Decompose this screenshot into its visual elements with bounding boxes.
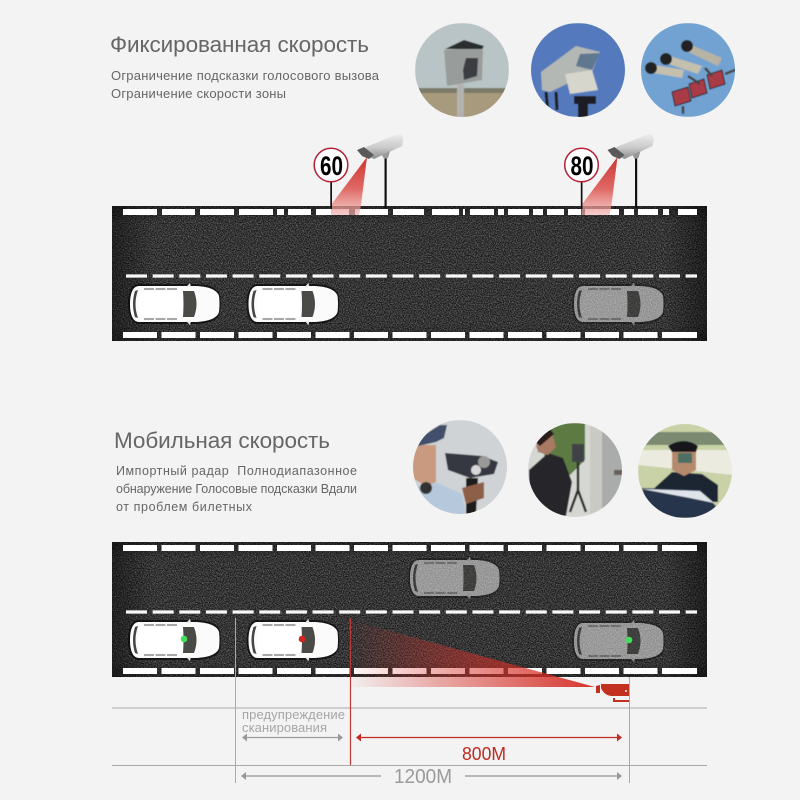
arrow: 1200m range left: [241, 772, 381, 780]
scale guide lines: [112, 618, 707, 783]
photo: cluster of traffic cameras: [640, 23, 740, 117]
800m boundary line: [350, 618, 352, 765]
camera pole: [384, 158, 387, 208]
arrow: scan warning range: [242, 734, 343, 742]
road: mobile speed: [112, 542, 707, 677]
asphalt surface: [112, 206, 707, 341]
text block: fixed speed description: [111, 68, 380, 101]
car ahead: grey, upper lane: [408, 557, 501, 599]
camera body: [357, 134, 403, 159]
sign pole: [330, 182, 332, 209]
arrow: 800m range: [356, 734, 622, 742]
camera pole: [635, 158, 637, 208]
car 2: [246, 283, 339, 325]
bottom lane markings: [123, 332, 697, 338]
car 1: [128, 283, 221, 325]
radar beam: [350, 620, 595, 687]
camera beam: [331, 157, 367, 215]
centre dashed line: [126, 275, 697, 277]
heading: fixed speed: Фиксированная скорость: [110, 32, 369, 57]
car 3: grey: [572, 283, 665, 325]
speed camera unit 60: [314, 134, 403, 215]
text block: mobile speed description: от проблем билетных: [116, 500, 253, 514]
asphalt surface: [112, 542, 707, 677]
label: scan warning: предупреждение: [242, 707, 345, 722]
speed camera unit 80: [565, 134, 654, 215]
text block: fixed speed description: Ограничение подсказки голосового вызова: [111, 68, 380, 83]
top lane markings: [123, 545, 697, 551]
bottom lane markings: [123, 668, 697, 674]
arrow: 1200m range right: [465, 772, 622, 780]
text block: mobile speed description: обнаружение Голосовые подсказки Вдали: [116, 482, 357, 496]
text block: mobile speed description: Импортный радар Полнодиапазонное: [116, 464, 357, 478]
car 3 with green marker: [572, 620, 665, 662]
section: fixed speed header: [110, 32, 380, 101]
photo: officer beside tripod radar: [528, 423, 624, 518]
radar camera icon: [596, 684, 630, 702]
centre dashed line: [126, 611, 697, 613]
car 1 with green marker: [128, 619, 221, 661]
label: 800M: 800М: [462, 744, 506, 764]
photo: officer aiming laser radar over car: [638, 423, 734, 519]
top lane markings: [123, 209, 697, 215]
camera body: [608, 134, 654, 159]
speed limit sign 60: 60: [320, 151, 343, 181]
photo: roadside speed camera box: [415, 23, 509, 118]
sign pole: [581, 182, 582, 209]
section: mobile speed header: [114, 428, 357, 514]
label: scan warning: [242, 707, 345, 735]
label: 1200M: 1200М: [394, 766, 452, 788]
text block: fixed speed description: Ограничение скорости зоны: [111, 86, 286, 101]
text block: mobile speed description: [116, 464, 357, 514]
photo: officer with radar gun: [412, 420, 508, 516]
photo: security camera on blue sky: [530, 23, 626, 118]
car 2 with red marker: [246, 619, 339, 661]
speed limit sign 80: 80: [570, 151, 594, 181]
camera beam: [582, 157, 618, 215]
road: fixed speed: [112, 206, 707, 341]
heading: mobile speed: Мобильная скорость: [114, 428, 330, 453]
label: scan warning: сканирования: [242, 720, 327, 735]
distance scale: [112, 618, 707, 788]
